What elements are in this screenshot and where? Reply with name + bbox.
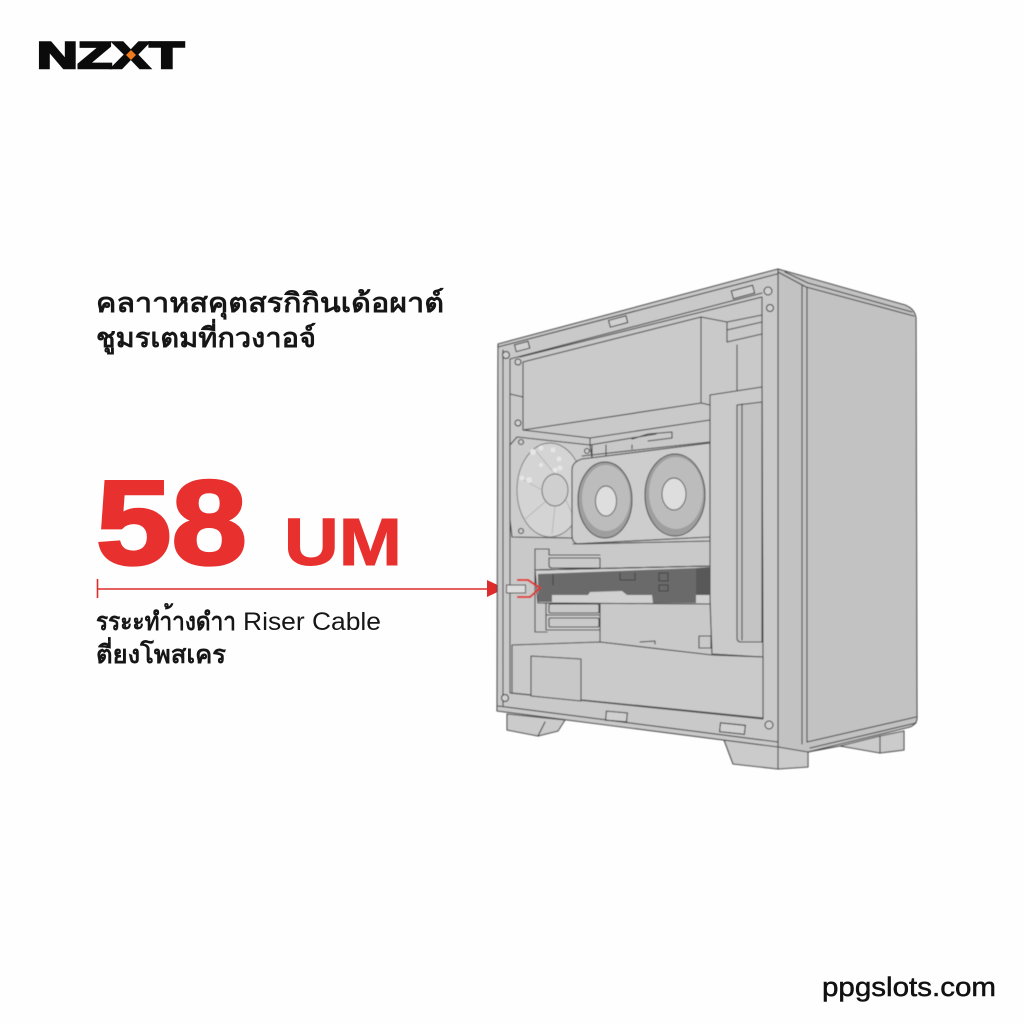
illustration: PC case: [497, 269, 917, 769]
PCIe slots and riser bracket: [535, 549, 600, 642]
GPU fan right: [645, 454, 705, 536]
caption text: รระะทำ้างดำา: [96, 602, 236, 636]
rear radiator fan: [510, 432, 672, 538]
case rail clips and screws: [502, 285, 774, 734]
dark card seen from below: [535, 566, 710, 604]
caption text: Riser Cable: [243, 608, 381, 636]
heading text: [96, 287, 444, 355]
big measurement: 58 mm: UM: [284, 505, 402, 580]
heading text: คลาาหสคุตสรกิกินเด้อผาต์: [96, 287, 444, 320]
case front frame: [497, 269, 778, 747]
red connector highlight: [506, 580, 540, 597]
logo: NZXT: [37, 35, 185, 76]
website label: ppgslots.com: [822, 972, 996, 1002]
graphics card with two fans: [572, 442, 710, 544]
upper shroud box: [510, 315, 762, 438]
heading text: ชูมรเตมที่กวงาอจ์: [96, 318, 316, 355]
GPU fan left: [578, 462, 632, 538]
caption text: ตี่ยงโพสเคร: [96, 637, 227, 669]
big measurement: 58 mm: [96, 456, 402, 590]
right vertical bracket: [710, 387, 763, 657]
big measurement: 58 mm: 58: [96, 456, 247, 590]
lower PSU shroud: [512, 636, 763, 718]
caption text: [96, 602, 381, 669]
case right side panel: [778, 269, 917, 752]
case feet: [507, 714, 904, 769]
logo: NZXT: NZXT: [37, 35, 185, 76]
red dimension line with arrow: [98, 579, 505, 598]
